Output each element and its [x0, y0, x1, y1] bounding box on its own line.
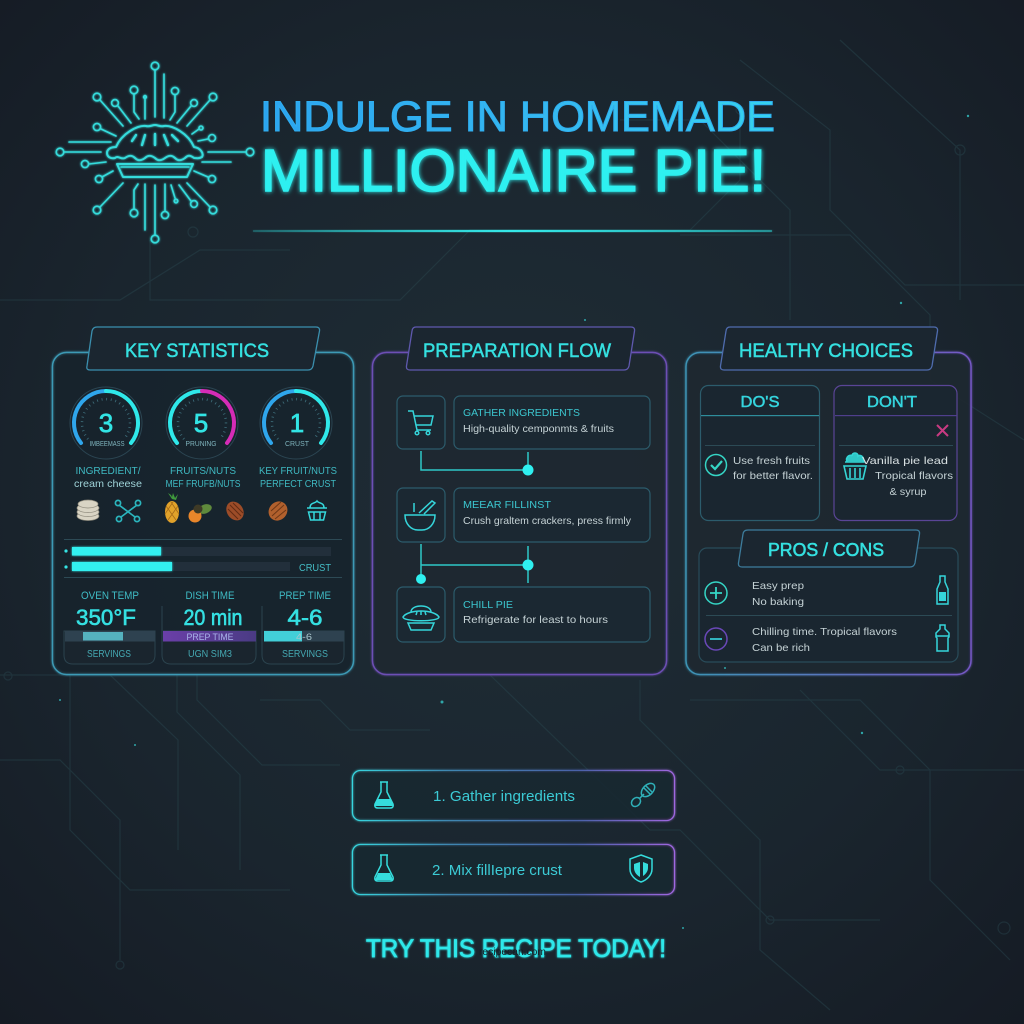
step button 2: 2. Mix fillIepre crust [432, 862, 563, 879]
step 3: chill pie: CHILL PIE [463, 599, 513, 611]
title line 1: INDULGE IN HOMEMADE [260, 93, 775, 141]
panel: key statistics [52, 327, 354, 674]
icon: plate stack [77, 500, 99, 520]
card: do's [700, 386, 820, 520]
step button 1: 1. Gather ingredients [433, 788, 575, 805]
stat: oven temp: SERVINGS [87, 649, 131, 660]
card: pros and cons: Can be rich [752, 642, 810, 654]
icon: jar [936, 625, 949, 651]
icon: flask [375, 855, 393, 881]
card: pros and cons: Chilling time. Tropical flavors [752, 626, 897, 638]
heading: preparation flow: PREPARATION FLOW [423, 341, 611, 362]
gauge captions: KEY FRUIT/NUTS [259, 465, 337, 477]
gauge: crust 1: 1 [290, 408, 304, 438]
title divider [253, 230, 772, 232]
icon: basket [307, 501, 327, 520]
icon: basket of fruit [844, 453, 866, 479]
step 2: prepare filling [397, 488, 650, 542]
step 1: gather ingredients: GATHER INGREDIENTS [463, 407, 580, 419]
icon: shield [630, 855, 652, 882]
step 2: prepare filling: MEEAR FILLINST [463, 499, 552, 511]
card: do's: for better flavor. [733, 470, 813, 482]
icon: pineapple [165, 493, 179, 523]
icon: cross [937, 425, 948, 436]
icon: pecan [223, 498, 247, 524]
card: don't: DON'T [867, 394, 917, 411]
heading: pros and cons [738, 530, 920, 567]
card: pros and cons: Easy prep [752, 580, 804, 592]
icon: orange and leaf [188, 502, 213, 522]
gauge: ingredients 3: IMBEEMASS [90, 441, 125, 448]
decorative star dots [59, 115, 969, 929]
heading: key statistics [87, 327, 320, 370]
source watermark: recipecan.com [479, 947, 546, 958]
progress bars [64, 539, 342, 578]
heading: preparation flow [406, 327, 635, 370]
gauge captions: PERFECT CRUST [260, 478, 336, 490]
card: do's: DO'S [740, 394, 780, 411]
icon: minus [705, 628, 727, 650]
icon: shopping cart [408, 411, 433, 435]
card: don't: Tropical flavors [875, 470, 953, 482]
gauge captions: INGREDIENT/ [76, 465, 141, 477]
stat: oven temp [64, 590, 155, 664]
gauge: ingredients 3 [70, 387, 142, 459]
stat: dish time: 20 min [184, 605, 242, 630]
icon: covered pie [403, 606, 439, 630]
stat: prep time [262, 590, 344, 664]
stat: dish time: UGN SIM3 [188, 649, 232, 660]
card: pros and cons: No baking [752, 596, 804, 608]
stat: dish time: PREP TIME [186, 632, 234, 643]
icon: whisk [630, 781, 657, 808]
step button 1 [352, 770, 674, 820]
stat: dish time: DISH TIME [186, 590, 234, 602]
heading: healthy choices: HEALTHY CHOICES [739, 341, 913, 362]
icon: mixing bowl [405, 501, 435, 530]
title [260, 93, 775, 204]
gauge captions [74, 465, 337, 490]
heading: healthy choices [720, 327, 938, 370]
icon: plus [705, 582, 727, 604]
card: don't: Vanilla pie lead [862, 455, 948, 467]
flow connectors [416, 451, 534, 584]
step button 2 [352, 844, 674, 894]
gauge: ingredients 3: 3 [99, 408, 113, 438]
panel: healthy choices [686, 327, 971, 674]
gauge: fruits and nuts 5 [166, 387, 238, 459]
icon: walnut [265, 498, 291, 524]
gauge captions: MEF FRUFB/NUTS [166, 478, 240, 490]
gauge: crust 1 [260, 387, 332, 459]
step 3: chill pie: Refrigerate for least to hours [463, 614, 608, 626]
heading: pros and cons: PROS / CONS [768, 540, 884, 560]
icon: crossed whisks [115, 500, 141, 522]
step 1: gather ingredients: High-quality cemponmts & fruits [463, 423, 614, 435]
gauge captions: FRUITS/NUTS [170, 465, 236, 477]
gauge: crust 1: CRUST [285, 441, 310, 448]
gauge: fruits and nuts 5: PRUNING [186, 441, 216, 448]
stat: dish time [162, 590, 256, 664]
title line 2: MILLIONAIRE PIE! [261, 138, 766, 204]
stat: prep time: SERVINGS [282, 649, 328, 660]
gauge captions: cream cheese [74, 478, 142, 490]
stat: prep time: PREP TIME [279, 590, 331, 602]
call to action: TRY THIS RECIPE TODAY! [366, 935, 666, 963]
gauge: fruits and nuts 5: 5 [194, 408, 208, 438]
panel: preparation flow [372, 327, 666, 674]
stat: prep time: 4-6 [288, 605, 322, 630]
icon: bottle [937, 576, 948, 604]
stat: oven temp: OVEN TEMP [81, 590, 139, 602]
icon: check mark [706, 454, 726, 476]
card: don't [834, 386, 957, 520]
stat: oven temp: 350°F [76, 605, 136, 630]
card: do's: Use fresh fruits [733, 455, 810, 467]
card: pros and cons [699, 530, 958, 662]
icon: flask [375, 782, 393, 808]
icon: pie with circuit rays [56, 62, 254, 243]
step 1: gather ingredients [397, 396, 650, 449]
heading: key statistics: KEY STATISTICS [125, 341, 269, 362]
step 3: chill pie [397, 587, 650, 642]
card: don't: & syrup [890, 486, 927, 498]
stat: prep time: 4-6 [296, 632, 312, 642]
step 2: prepare filling: Crush graltem crackers, press firmly [463, 515, 632, 527]
progress bars: CRUST [299, 562, 332, 574]
